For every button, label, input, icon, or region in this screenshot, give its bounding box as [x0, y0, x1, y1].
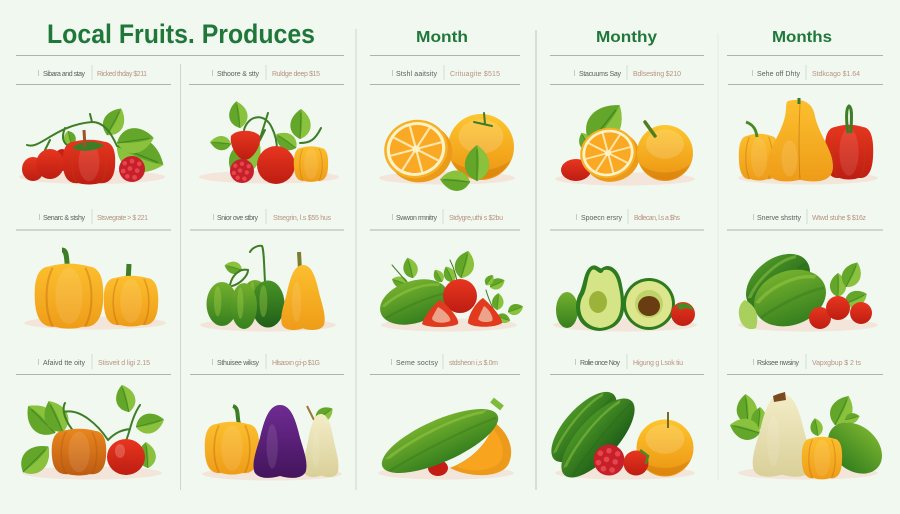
- label row: Hlsasxn g:i-p $1G: [272, 360, 320, 367]
- label row: Afaivd tte oity: [43, 360, 86, 367]
- icon: green squash, lettuce, tomatoes: [735, 242, 878, 336]
- label row: Sibara and stay: [43, 71, 86, 78]
- label row: stdsheon i,s $.0m: [449, 360, 498, 367]
- label row: Stacuums Say: [579, 71, 622, 78]
- label row: Swwon rmnitry: [396, 215, 438, 222]
- horizontal rules: [16, 56, 883, 374]
- label row: Rsksee nwsiny: [757, 360, 800, 367]
- label row: Stdkcago $1.64: [812, 71, 860, 78]
- column dividers: [180, 29, 718, 490]
- label row: [392, 65, 500, 80]
- icon: cucumber, orange half, tomato: [374, 396, 514, 486]
- column heading: Month: Month: [416, 29, 468, 46]
- label row: [752, 65, 860, 80]
- label row: Spoecn ersry: [581, 215, 622, 222]
- label row: Ricked thday $211: [97, 71, 147, 78]
- panel: row 3 column 2: [202, 354, 342, 480]
- icon: yellow pumpkin peppers: [24, 250, 166, 330]
- panel: row 3 column 3: [374, 354, 514, 486]
- label row: [754, 354, 862, 369]
- panel: row 2 column 4: [553, 209, 697, 332]
- icon: white gourd, pumpkin, greens: [727, 391, 892, 484]
- label row: Bdlecan, l.s a $hs: [634, 215, 680, 222]
- label row: Stshl aaitsity: [396, 71, 438, 78]
- label row: [212, 65, 320, 80]
- label row: Seme soctsy: [396, 360, 438, 367]
- icon: avocado halves and tomato: [553, 265, 697, 332]
- label row: [40, 209, 148, 224]
- label row: [574, 65, 681, 80]
- icon: cut orange and whole orange: [378, 112, 515, 192]
- label row: Rolie once Noy: [580, 360, 620, 367]
- column heading: Monthy: Monthy: [596, 29, 657, 46]
- panel: row 1 column 3: [378, 65, 515, 192]
- label row: Wtwd stuhe $ $16z: [812, 215, 866, 222]
- panel: row 3 column 4: [540, 354, 695, 489]
- icon: yellow pepper, eggplant, pear: [202, 403, 342, 480]
- panel: row 1 column 5: [738, 65, 878, 184]
- label row: [392, 354, 498, 369]
- label row: Senarc & stshy: [43, 215, 86, 222]
- icon: cucumbers, raspberry, tomato, orange: [540, 382, 695, 489]
- label row: [392, 209, 503, 224]
- icon: orange pumpkin, tomato and leaves: [14, 383, 167, 481]
- label row: [576, 354, 683, 369]
- label row: [214, 209, 332, 224]
- icon: strawberries, tomato, yellow pepper: [199, 100, 339, 184]
- label row: [38, 65, 147, 80]
- title: Local Fruits. Produces: [47, 19, 315, 49]
- icon: yellow peppers, squash, red pepper: [738, 98, 878, 184]
- panel: row 3 column 1: [14, 354, 167, 481]
- icon: melon, strawberries and herbs: [374, 249, 525, 333]
- icon: green squash and yellow gourd: [200, 246, 336, 332]
- label row: Sthuisee wiksy: [217, 360, 260, 367]
- label row: Stsegrin, l.s $55 hus: [273, 215, 332, 222]
- label row: Snerve shstrty: [757, 215, 802, 222]
- icon: tomatoes, red pepper, raspberry: [19, 104, 170, 184]
- label row: Higung g Lsok tiu: [633, 360, 683, 367]
- label row: Sthoore & stty: [217, 71, 260, 78]
- column heading: Months: Months: [772, 29, 832, 46]
- label row: Stsvegrate > $ 221: [97, 215, 148, 222]
- label row: Crituagite $515: [450, 71, 500, 78]
- panel: row 1 column 1: [19, 65, 170, 184]
- label row: Snior ove stbry: [217, 215, 258, 222]
- label row: Vapxgbup $ 2 ts: [812, 360, 862, 367]
- label row: [576, 209, 680, 224]
- panel: row 2 column 3: [374, 209, 525, 333]
- panel: row 2 column 2: [200, 209, 336, 332]
- label row: Stisveit d ligi 2.15: [98, 360, 150, 367]
- panel: row 2 column 1: [24, 209, 166, 330]
- label row: Stdygre,uthi s $2bu: [449, 215, 503, 222]
- panel: row 1 column 2: [199, 65, 339, 184]
- panel: row 1 column 4: [555, 65, 695, 189]
- icon: orange halves, strawberry and leaves: [555, 95, 695, 189]
- panel: row 2 column 5: [735, 209, 878, 336]
- label row: [212, 354, 320, 369]
- label row: [38, 354, 150, 369]
- label row: Bdlsesting $210: [633, 71, 681, 78]
- label row: Ruldge deep $15: [272, 71, 320, 78]
- label row: [754, 209, 866, 224]
- label row: Sehe off Dhty: [757, 71, 800, 78]
- panel: row 3 column 5: [727, 354, 892, 484]
